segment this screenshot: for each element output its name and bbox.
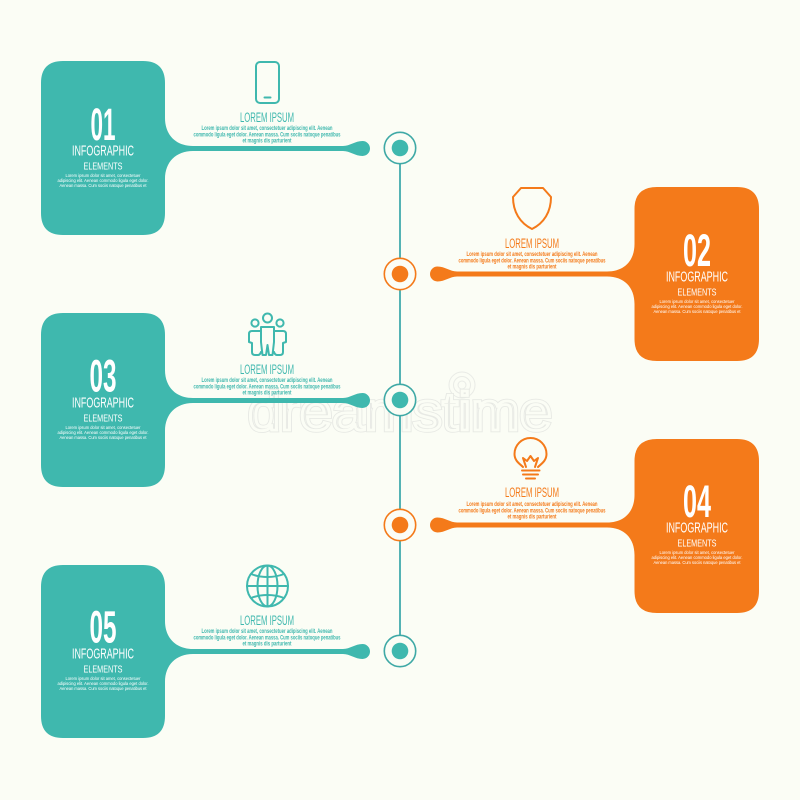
icon: light bulb [514, 438, 546, 478]
icon: smartphone [256, 62, 279, 103]
panel: step 02 [430, 187, 759, 361]
card label 05: INFOGRAPHIC [72, 646, 134, 662]
heading and text 01: et magnis dis parturient [242, 138, 292, 144]
heading and text 05: LOREM IPSUM [240, 613, 294, 628]
card with connector 04 [430, 439, 759, 613]
card with connector 03 [41, 313, 370, 487]
card label 03: INFOGRAPHIC [72, 396, 134, 412]
timeline node 03 [384, 384, 416, 416]
card label 01: INFOGRAPHIC [72, 144, 134, 160]
heading and text 05: commodo ligula eget dolor. Aenean massa. Cum sociis natoque penatibus [194, 635, 341, 641]
heading and text 01: commodo ligula eget dolor. Aenean massa. Cum sociis natoque penatibus [194, 132, 341, 138]
card label 03: Lorem ipsum dolor sit amet, consectetuer [66, 425, 141, 431]
card label 04 [652, 520, 742, 566]
heading and text 02 [458, 236, 606, 270]
card label 01: Aenean massa. Cum sociis natoque penatibus et [60, 183, 147, 189]
card with connector 01 [41, 61, 370, 235]
heading and text 02: LOREM IPSUM [505, 236, 559, 251]
timeline node 02 [384, 258, 416, 290]
heading and text 02: Lorem ipsum dolor sit amet, consectetuer adipiscing elit. Aenean [466, 252, 598, 258]
card label 02: Lorem ipsum dolor sit amet, consectetuer [660, 299, 735, 305]
card label 01 [58, 144, 148, 189]
heading and text 05: et magnis dis parturient [242, 642, 292, 648]
heading and text 04: Lorem ipsum dolor sit amet, consectetuer adipiscing elit. Aenean [466, 502, 598, 508]
card label 01: Lorem ipsum dolor sit amet, consectetuer [66, 173, 141, 179]
heading and text 03: et magnis dis parturient [242, 390, 292, 396]
icon: people [249, 314, 286, 355]
card with connector 05 [41, 565, 370, 738]
card label 01: ELEMENTS [84, 160, 122, 172]
panel: step 05 [41, 565, 370, 738]
panel: step 01 [41, 61, 370, 235]
heading and text 03 [194, 362, 341, 396]
timeline node 01 [384, 132, 416, 164]
watermark: dreamstime [248, 382, 552, 442]
card label 01: adipiscing elit. Aenean commodo ligula eget dolor. [58, 178, 148, 184]
watermark: dreamstime [248, 382, 552, 442]
icon: shield [513, 188, 551, 229]
card label 05: ELEMENTS [84, 664, 122, 676]
card label 02: INFOGRAPHIC [666, 270, 728, 286]
timeline vertical line [399, 148, 401, 651]
card label 03: ELEMENTS [84, 412, 122, 424]
heading and text 04 [458, 485, 606, 520]
card label 02: ELEMENTS [678, 286, 716, 298]
heading and text 04: et magnis dis parturient [508, 514, 556, 520]
heading and text 03: commodo ligula eget dolor. Aenean massa. Cum sociis natoque penatibus [194, 384, 341, 390]
number 02: 02 [683, 225, 711, 276]
heading and text 02: et magnis dis parturient [508, 264, 556, 270]
heading and text 05: Lorem ipsum dolor sit amet, consectetuer adipiscing elit. Aenean [202, 629, 333, 635]
card label 04: Lorem ipsum dolor sit amet, consectetuer [660, 550, 735, 556]
number 05: 05 [90, 602, 116, 652]
card label 04: ELEMENTS [678, 538, 716, 550]
card label 05: adipiscing elit. Aenean commodo ligula eget dolor. [58, 681, 148, 687]
heading and text 03: LOREM IPSUM [240, 362, 294, 377]
panel: step 01: 01 [90, 99, 116, 150]
card label 04: adipiscing elit. Aenean commodo ligula eget dolor. [652, 555, 742, 561]
heading and text 02: commodo ligula eget dolor. Aenean massa. Cum sociis natoque penatibus [458, 258, 606, 264]
card label 03 [58, 396, 148, 441]
heading and text 03: Lorem ipsum dolor sit amet, consectetuer adipiscing elit. Aenean [202, 378, 333, 384]
heading and text 01 [194, 110, 341, 144]
card label 05 [58, 646, 148, 692]
number 03: 03 [90, 350, 116, 402]
heading and text 01: LOREM IPSUM [240, 110, 294, 125]
card label 03: Aenean massa. Cum sociis natoque penatibus et [60, 435, 147, 441]
card label 05: Lorem ipsum dolor sit amet, consectetuer [66, 676, 141, 682]
timeline node 05 [384, 635, 416, 667]
heading and text 01: Lorem ipsum dolor sit amet, consectetuer adipiscing elit. Aenean [202, 126, 333, 132]
panel: step 03 [41, 313, 370, 487]
card label 05: Aenean massa. Cum sociis natoque penatibus et [60, 686, 147, 692]
number 04: 04 [683, 476, 711, 527]
card label 03: adipiscing elit. Aenean commodo ligula eget dolor. [58, 430, 148, 436]
heading and text 04: LOREM IPSUM [505, 485, 559, 500]
card with connector 02 [430, 187, 759, 361]
card label 04: INFOGRAPHIC [666, 520, 728, 536]
card label 02 [652, 270, 742, 315]
icon: globe [247, 566, 288, 606]
heading and text 05 [194, 613, 341, 648]
timeline node 04 [384, 509, 416, 541]
panel: step 04 [430, 438, 759, 613]
card label 02: adipiscing elit. Aenean commodo ligula eget dolor. [652, 304, 742, 310]
card label 02: Aenean massa. Cum sociis natoque penatibus et [654, 309, 741, 315]
card label 04: Aenean massa. Cum sociis natoque penatibus et [654, 560, 741, 566]
heading and text 04: commodo ligula eget dolor. Aenean massa. Cum sociis natoque penatibus [458, 508, 606, 514]
